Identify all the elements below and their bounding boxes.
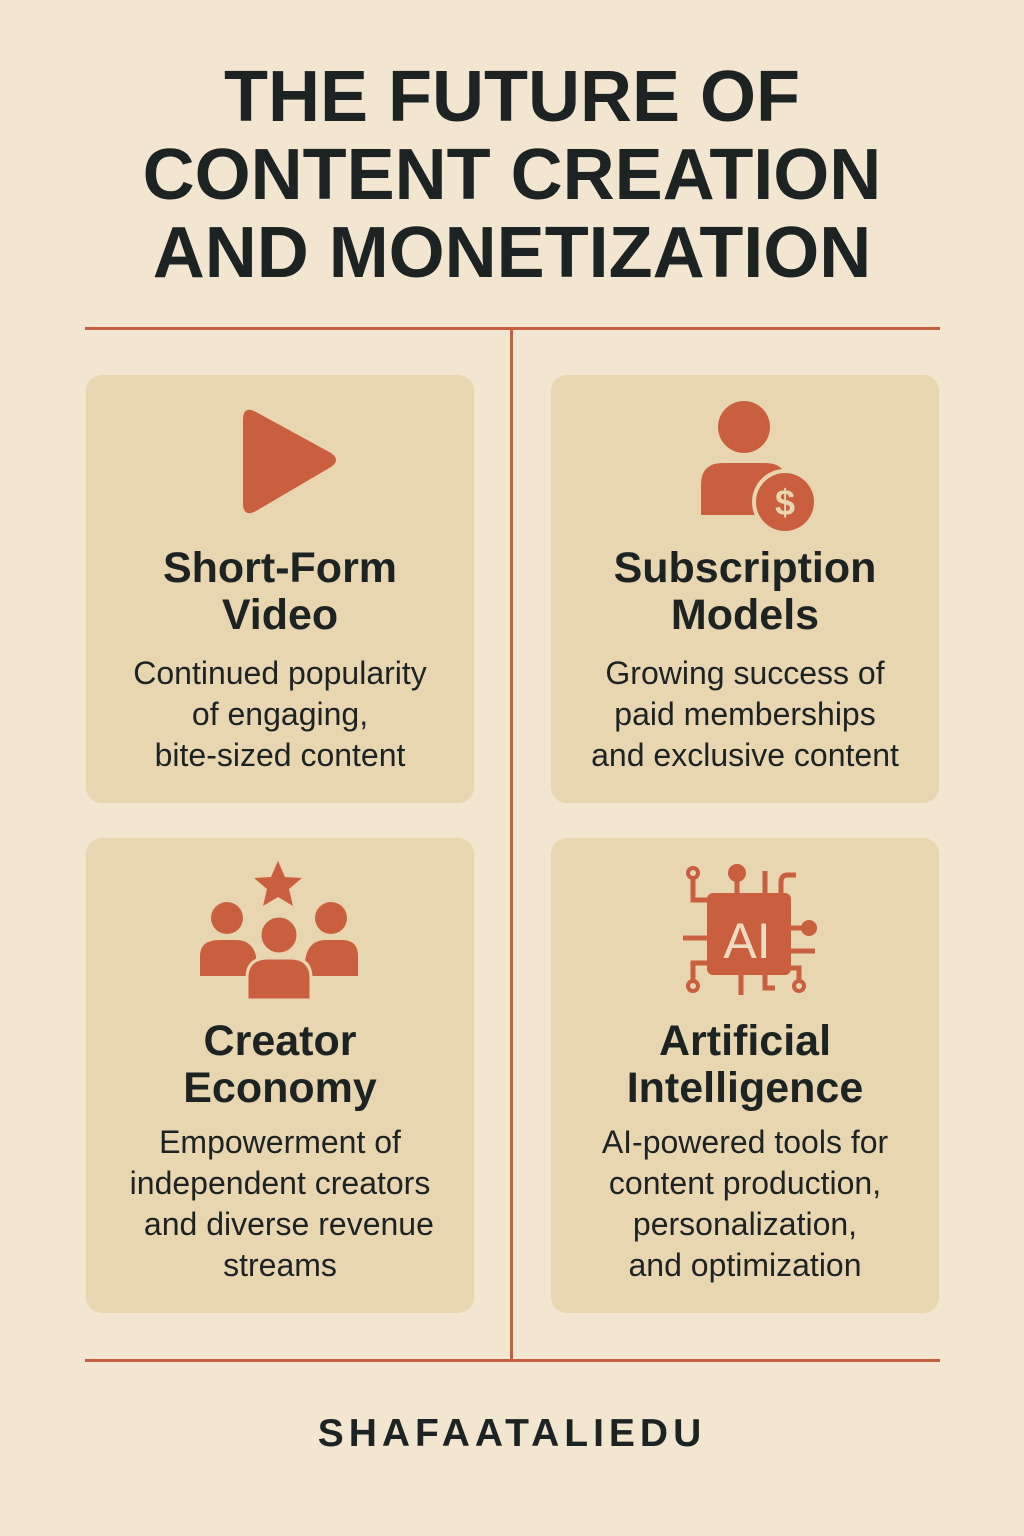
heading: creator economy: Economy: [183, 1064, 377, 1112]
text: short-form description: bite-sized content: [155, 737, 405, 773]
panel: artificial intelligence: [551, 838, 939, 1313]
icon: play: [243, 410, 336, 514]
panel: subscription models: [551, 375, 939, 803]
title: THE FUTURE OF: [224, 57, 800, 137]
text: short-form description: of engaging,: [192, 696, 368, 732]
icon: person with dollar: [701, 401, 814, 531]
heading: short-form video: Video: [222, 591, 338, 639]
text: short-form description: [133, 655, 427, 773]
heading: AI: [627, 1017, 863, 1112]
footer: SHAFAATALIEDU: [318, 1412, 706, 1455]
panel: short-form video: [86, 375, 474, 803]
panel: creator economy: [86, 838, 474, 1313]
text: AI description: content production,: [609, 1165, 881, 1201]
text: creator description: [130, 1124, 434, 1283]
title: AND MONETIZATION: [153, 213, 871, 293]
text: AI description: personalization,: [633, 1206, 857, 1242]
text: creator description: and diverse revenue: [144, 1206, 434, 1242]
heading: subscription: Subscription: [614, 544, 876, 592]
heading: creator economy: [183, 1017, 377, 1112]
text: short-form description: Continued popularity: [133, 655, 427, 691]
text: creator description: streams: [223, 1247, 337, 1283]
text: subscription description: paid memberships: [614, 696, 876, 732]
text: subscription description: and exclusive content: [591, 737, 899, 773]
heading: creator economy: Creator: [204, 1017, 356, 1065]
text: AI description: AI-powered tools for: [602, 1124, 888, 1160]
title: [143, 57, 881, 293]
icon: AI chip: AI: [723, 913, 771, 969]
text: AI description: and optimization: [628, 1247, 862, 1283]
text: subscription description: [591, 655, 899, 773]
text: AI description: [602, 1124, 888, 1283]
text: creator description: Empowerment of: [159, 1124, 401, 1160]
icon: AI chip: [683, 864, 817, 995]
heading: subscription: Models: [671, 591, 819, 639]
heading: subscription: [614, 544, 876, 639]
text: subscription description: Growing success of: [605, 655, 885, 691]
heading: AI: Artificial: [659, 1017, 831, 1065]
heading: short-form video: [163, 544, 397, 639]
icon: group with star: [200, 861, 358, 998]
text: creator description: independent creators: [130, 1165, 430, 1201]
heading: AI: Intelligence: [627, 1064, 863, 1112]
heading: short-form video: Short-Form: [163, 544, 397, 592]
icon: person with dollar: $: [775, 482, 795, 523]
title: CONTENT CREATION: [143, 135, 881, 215]
